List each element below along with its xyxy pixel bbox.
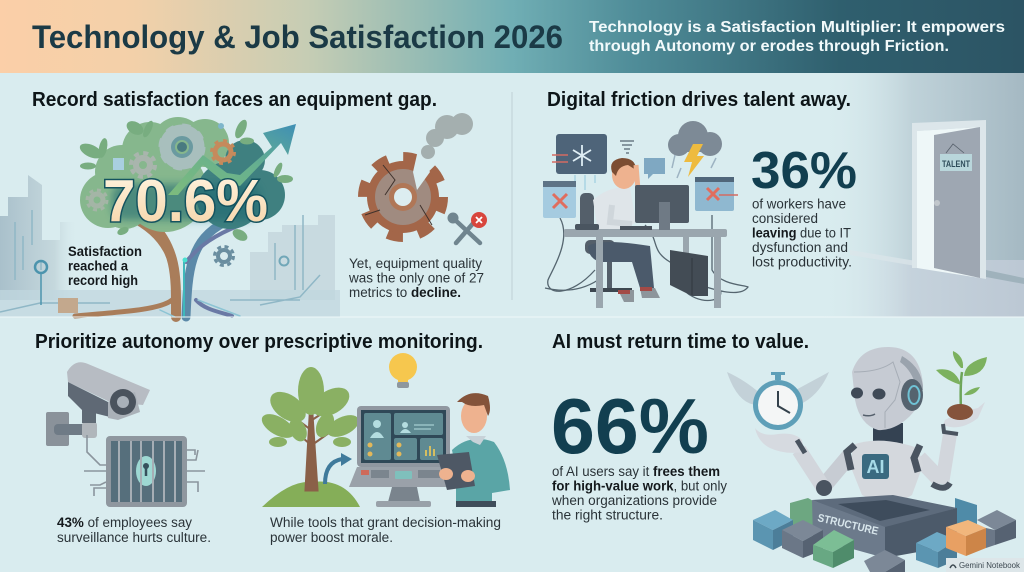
text: AI users: of AI users say it frees them	[552, 464, 720, 479]
header banner	[0, 0, 1024, 73]
text: workers leaving: of workers have	[752, 196, 846, 212]
illustration: dashboard computer	[349, 406, 450, 507]
text: decision-making tools: power boost morale.	[270, 530, 393, 545]
cables	[545, 215, 748, 300]
icon: light bulb	[389, 353, 417, 388]
structure label: STRUCTURE	[816, 512, 879, 538]
text: AI users: the right structure.	[552, 508, 663, 522]
stat: 66%: 66%	[551, 382, 709, 470]
head	[852, 347, 923, 430]
text: AI users: for high-value work, but only	[552, 478, 727, 494]
text: workers leaving	[752, 196, 852, 270]
cubes back	[790, 498, 977, 533]
heading: Digital friction drives talent away.	[547, 88, 851, 111]
text: workers leaving: dysfunction and	[752, 240, 848, 255]
door sign: TALENT	[942, 159, 970, 170]
text: equipment decline	[348, 256, 484, 300]
shoes	[618, 288, 660, 302]
cube: green front	[813, 530, 854, 568]
neck	[873, 423, 903, 445]
PC tower	[670, 250, 708, 296]
panel: autonomy over monitoring	[35, 330, 510, 545]
window: frozen app	[552, 134, 607, 190]
cube: gray right	[977, 510, 1016, 548]
text: surveillance: 43% of employees say	[57, 515, 192, 530]
text: workers leaving: leaving due to IT	[752, 226, 851, 240]
tornado icon	[620, 141, 634, 153]
text: surveillance: surveillance hurts culture.	[57, 530, 211, 545]
text: AI users	[551, 464, 727, 522]
left arm and hand	[755, 428, 850, 496]
text: decision-making tools	[270, 515, 501, 545]
speech bubble	[644, 158, 665, 179]
right arm and hand	[919, 402, 985, 488]
icon: wrench and screwdriver with error badge	[448, 212, 487, 243]
pants	[588, 242, 654, 288]
panel: AI return time	[551, 330, 1016, 572]
cube: blue left	[753, 510, 793, 550]
torso	[852, 441, 923, 502]
text: satisfaction record high: record high	[68, 273, 138, 288]
storm cloud and lightning	[668, 121, 722, 178]
text: equipment decline: was the only one of 27	[348, 270, 484, 286]
illustration: talent door	[912, 120, 986, 279]
title: Technology & Job Satisfaction 2026	[32, 19, 563, 55]
dark glow behind figure	[112, 184, 260, 220]
subtitle: Technology is a Satisfaction Multiplier: It empowers	[589, 19, 1005, 36]
panel: digital friction	[543, 73, 1024, 317]
heading: AI must return time to value.	[552, 330, 809, 353]
door sign	[940, 154, 972, 171]
stat: 36%: 36%	[751, 142, 857, 200]
cube: gray left	[782, 520, 823, 558]
icon: security camera	[46, 362, 150, 446]
AI badge	[862, 454, 889, 479]
text: decision-making tools: While tools that grant decision-making	[270, 515, 501, 530]
text: workers leaving: lost productivity.	[752, 254, 852, 270]
icon: caged chip	[84, 435, 205, 507]
structure box	[753, 495, 1016, 572]
cube: orange	[946, 520, 986, 556]
text: surveillance	[57, 515, 211, 545]
text: satisfaction record high	[68, 244, 142, 288]
door room background	[820, 73, 1024, 317]
panel: record satisfaction	[0, 88, 487, 317]
subtitle	[589, 19, 1005, 55]
plant	[936, 351, 987, 420]
desk	[564, 229, 727, 308]
icon: broken gear with smoke	[363, 113, 473, 237]
cube: gray bottom	[864, 550, 905, 572]
text: satisfaction record high: reached a	[68, 258, 128, 274]
keyboard and coffee cup	[575, 224, 599, 230]
headphone	[901, 379, 923, 411]
watermark	[946, 558, 1024, 572]
city background	[0, 175, 340, 317]
illustration: person with tablet	[437, 393, 510, 507]
illustration: satisfaction tree	[75, 117, 296, 317]
watermark: Gemini Notebook	[959, 560, 1021, 570]
subtitle: through Autonomy or erodes through Friction.	[589, 38, 949, 55]
shirt	[593, 188, 636, 232]
text: satisfaction record high: Satisfaction	[68, 244, 142, 259]
head	[611, 158, 638, 190]
icon: growing tree	[258, 367, 362, 507]
illustration: AI robot	[755, 347, 987, 502]
shoulders	[847, 445, 920, 472]
text: AI users: when organizations provide	[551, 493, 717, 508]
window: right error	[695, 177, 738, 211]
computer monitor	[620, 185, 689, 230]
office chair	[580, 193, 632, 292]
text: workers leaving: considered	[752, 211, 818, 226]
window: left error	[543, 181, 576, 218]
text: equipment decline: metrics to decline.	[349, 285, 461, 300]
growth arrow	[168, 124, 296, 195]
illustration: frustrated worker	[543, 121, 748, 308]
AI badge: AI	[866, 457, 884, 477]
icon: winged stopwatch	[727, 372, 829, 430]
stat: 70.6%: 70.6%	[103, 168, 268, 234]
text: equipment decline: Yet, equipment quality	[349, 256, 482, 271]
heading: Record satisfaction faces an equipment gap.	[32, 88, 437, 111]
heading: Prioritize autonomy over prescriptive monitoring.	[35, 330, 483, 353]
gears	[87, 126, 234, 266]
curved arrow	[325, 459, 342, 484]
cube: blue front	[916, 532, 957, 568]
